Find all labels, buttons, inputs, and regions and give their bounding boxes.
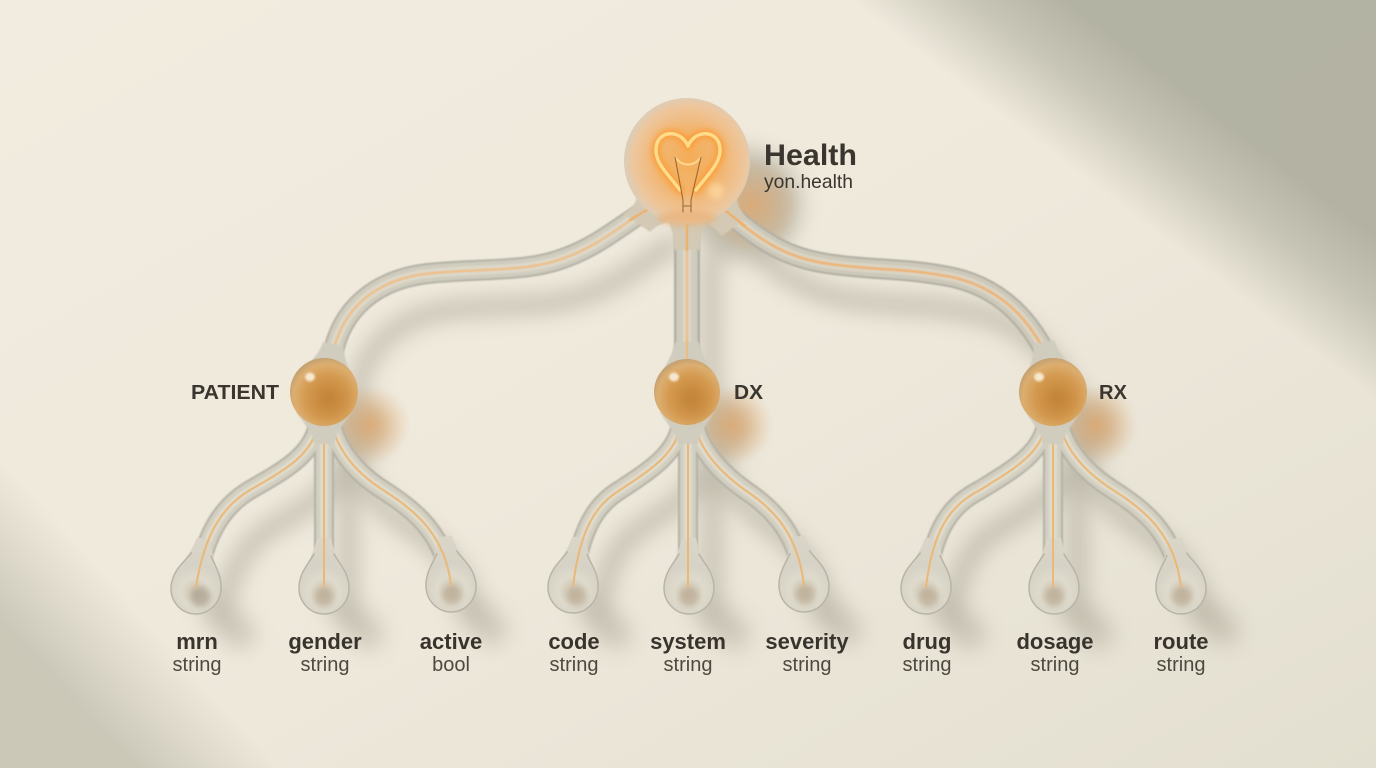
field label: gender: string <box>301 654 349 676</box>
field label: active: active <box>420 629 482 654</box>
field label: dosage: string <box>1031 654 1079 676</box>
field label: active: bool <box>432 654 470 676</box>
leaf bulb: mrn <box>167 535 229 618</box>
field label: code: string <box>550 654 598 676</box>
inner smile filament <box>675 157 701 164</box>
field label: route <box>1154 629 1208 676</box>
filament stem <box>675 157 701 212</box>
leaf bulb: code <box>545 534 604 616</box>
field label: drug: drug <box>903 629 951 654</box>
field label: mrn: string <box>173 654 221 676</box>
leaf bulb: active <box>420 533 479 615</box>
field label: gender <box>288 629 362 676</box>
leaf bulb: drug <box>898 535 957 617</box>
leaf bulb: gender <box>299 538 349 614</box>
main tube: root to DX <box>674 225 700 360</box>
field label: mrn <box>173 629 221 676</box>
node label: PATIENT: PATIENT <box>191 381 279 404</box>
leaf bulb: system <box>664 538 714 614</box>
field label: drug: string <box>903 654 951 676</box>
main tube: root to patient <box>332 208 650 358</box>
field label: system <box>650 629 726 676</box>
field label: system: system <box>650 629 726 654</box>
root bulb with heart filament <box>624 98 750 250</box>
leaf bulb: route <box>1150 535 1209 617</box>
field label: severity: string <box>783 654 831 676</box>
title: Health: Health <box>764 139 857 172</box>
field label: active <box>420 629 482 676</box>
field label: mrn: mrn <box>176 629 218 654</box>
leaf bulb: severity <box>773 533 832 615</box>
field label: route: string <box>1157 654 1205 676</box>
branch group: PATIENT <box>167 425 479 618</box>
cast shadows of the tree <box>212 150 1224 634</box>
orange glow shadows <box>330 157 1137 465</box>
node orb: DX <box>654 340 720 444</box>
field label: code <box>548 629 600 676</box>
field label: severity: severity <box>765 629 849 654</box>
branch group: DX <box>545 425 832 616</box>
field label: drug <box>903 629 951 676</box>
node label: RX: RX <box>1099 381 1127 404</box>
branch group: RX <box>898 425 1209 617</box>
leaf bulb: dosage <box>1029 538 1079 614</box>
main tube: root to RX <box>727 212 1048 358</box>
field label: code: code <box>548 629 600 654</box>
field label: gender: gender <box>288 629 362 654</box>
field label: severity <box>765 629 849 676</box>
heart filament glow <box>656 134 720 190</box>
node orb: RX <box>1019 340 1087 444</box>
subtitle: yon.health: yon.health <box>764 171 853 193</box>
heart filament <box>656 134 720 190</box>
field label: route: route <box>1154 629 1208 654</box>
field label: dosage: dosage <box>1016 629 1094 654</box>
field label: dosage <box>1016 629 1094 676</box>
node orb: PATIENT <box>290 342 358 444</box>
node label: DX: DX <box>734 381 763 404</box>
field label: system: string <box>664 654 712 676</box>
